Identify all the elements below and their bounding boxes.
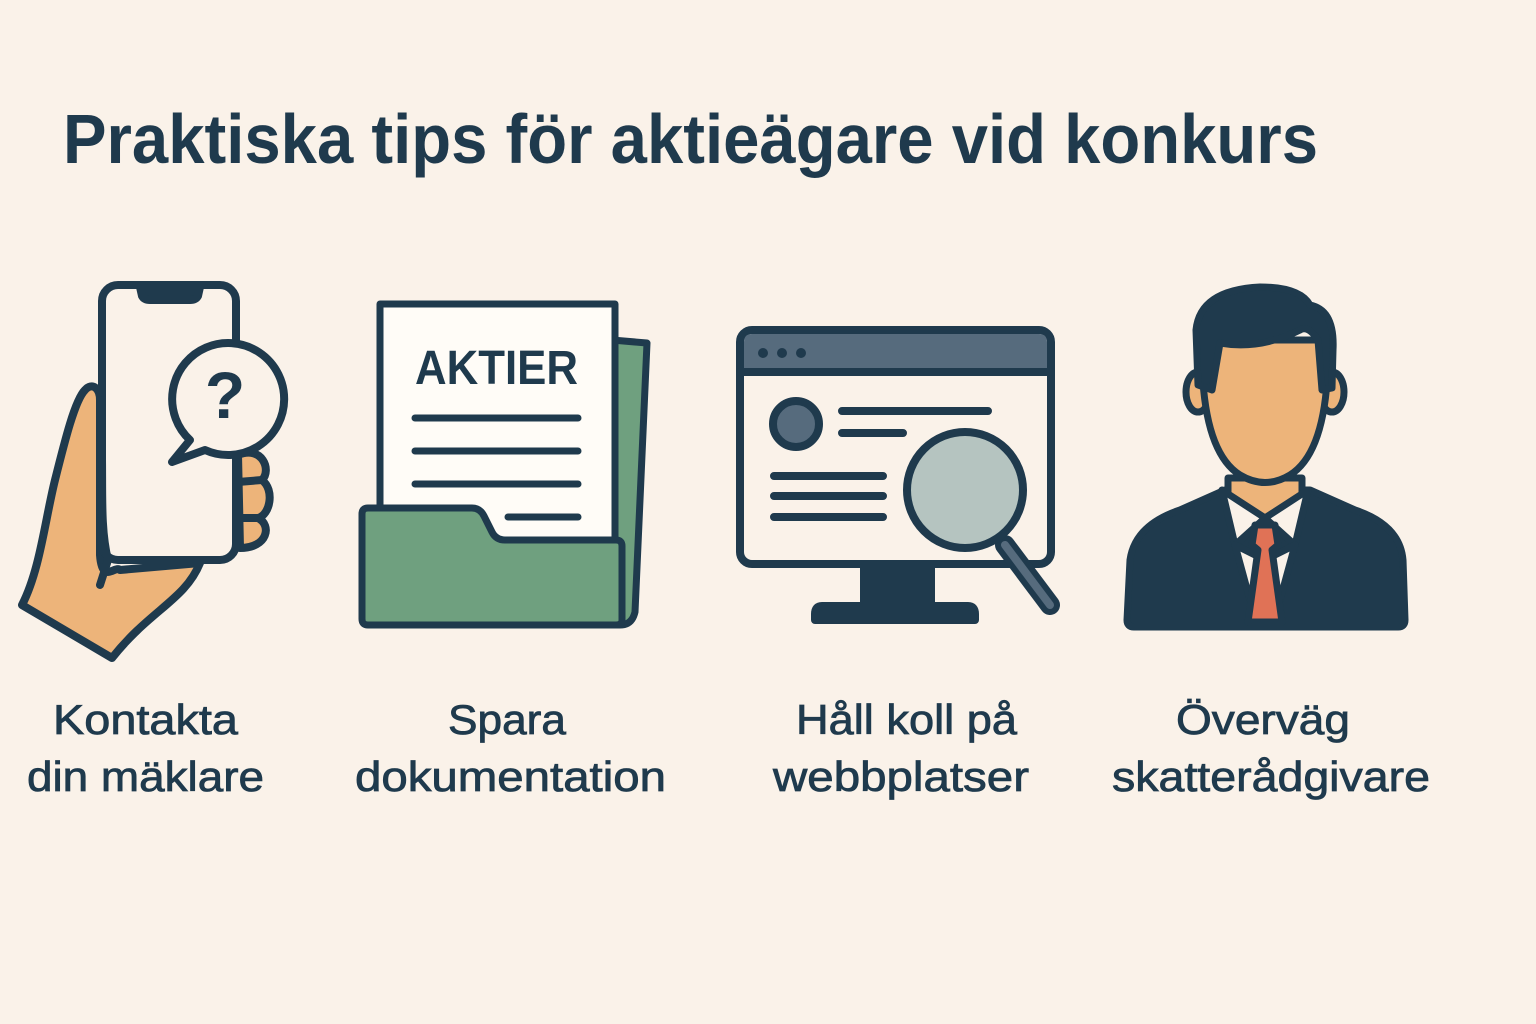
icon: dots [758,348,806,358]
hand [22,386,200,658]
label: Spara dokumentation [355,696,666,800]
phone body [102,285,236,560]
label: Spara dokumentation: dokumentation [355,753,666,800]
label: Överväg skatterådgivare [1112,696,1430,800]
title: Praktiska tips för aktieägare vid konkurs [63,100,1318,178]
label: Spara dokumentation: Spara [448,696,567,743]
label: Kontakta din mäklare [27,696,264,800]
label: Håll koll på webbplatser: Håll koll på [796,696,1018,743]
icon: phone in hand [22,285,284,658]
icon: advisor person [1127,287,1405,627]
speech bubble [172,343,284,462]
label: Håll koll på webbplatser: webbplatser [772,753,1029,800]
label: Överväg skatterådgivare: Överväg [1176,696,1350,743]
icon: question mark: ? [205,358,245,432]
label: Kontakta din mäklare: Kontakta [53,696,239,743]
label: Håll koll på webbplatser [772,696,1029,800]
notch [140,287,200,300]
icon: monitor with magnifier [740,330,1051,620]
label: Överväg skatterådgivare: skatterådgivare [1112,753,1430,800]
label: Kontakta din mäklare: din mäklare [27,753,264,800]
text: AKTIER: AKTIER [415,342,578,395]
icon: document folder [362,304,647,625]
